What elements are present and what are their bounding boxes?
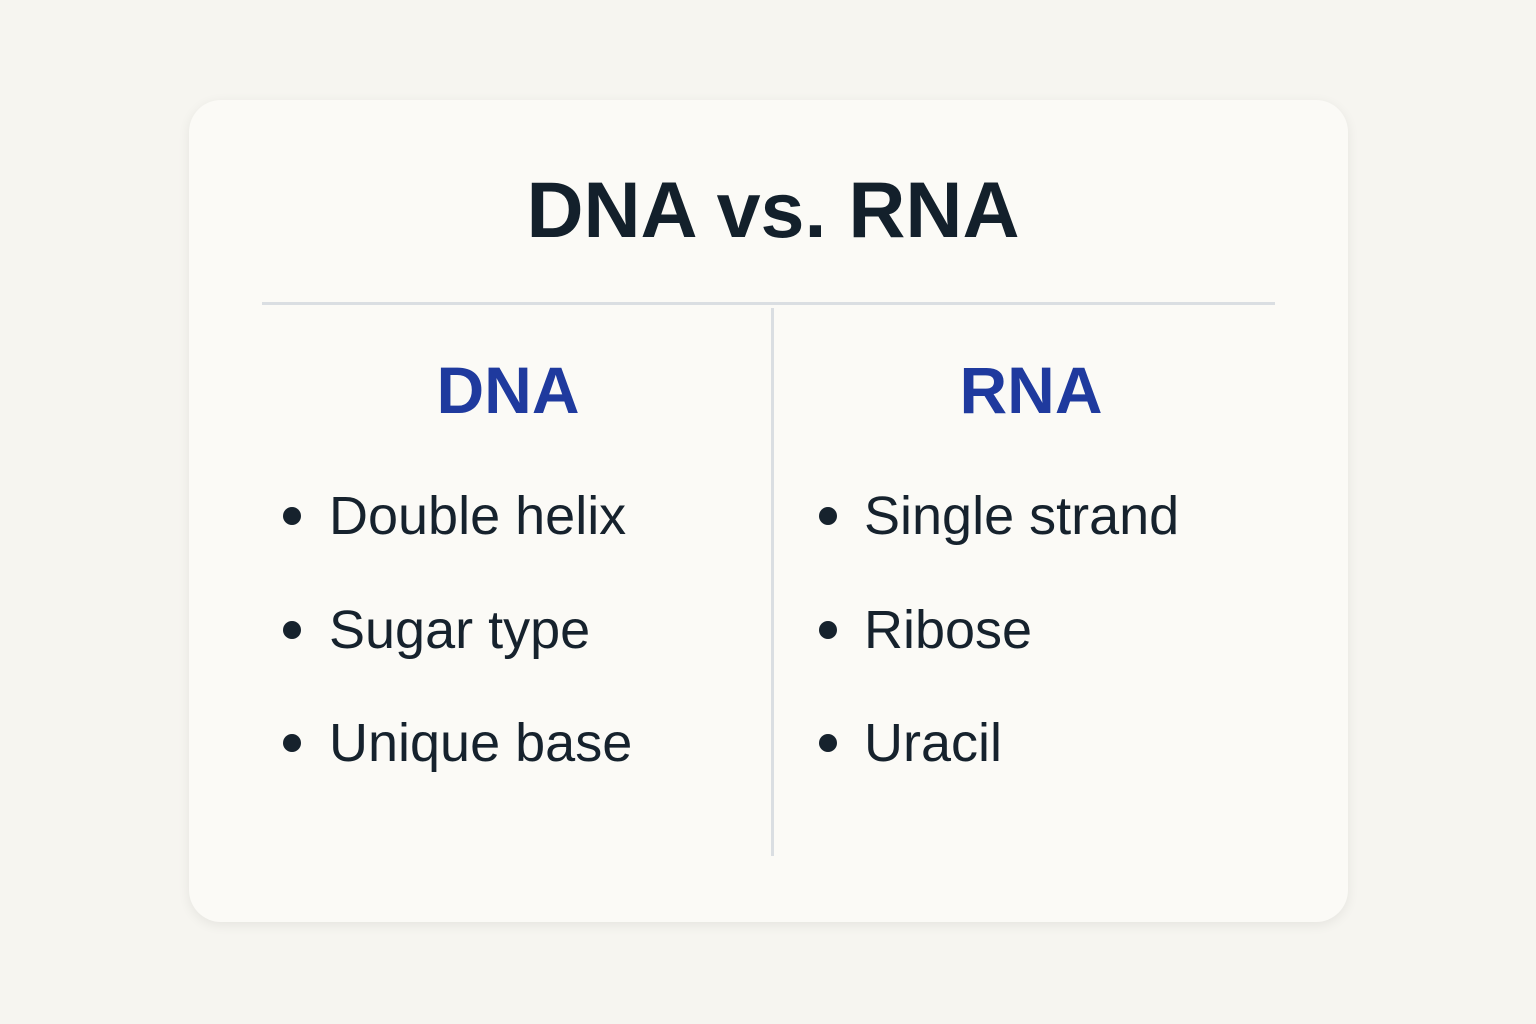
title: DNA vs. RNA bbox=[526, 165, 1020, 254]
list: RNA bbox=[819, 486, 1179, 773]
list: RNA: Single strand bbox=[864, 486, 1179, 546]
card bbox=[189, 100, 1348, 922]
panel: RNA bbox=[819, 353, 1179, 773]
list: DNA bbox=[283, 486, 632, 773]
list: DNA: Double helix bbox=[329, 486, 626, 546]
list: DNA: Unique base bbox=[329, 713, 632, 773]
list: RNA: Ribose bbox=[864, 600, 1032, 660]
panel: DNA bbox=[283, 353, 632, 773]
list: RNA: Uracil bbox=[864, 713, 1002, 773]
heading: DNA: DNA bbox=[436, 353, 580, 427]
list: DNA: Sugar type bbox=[329, 600, 590, 660]
heading: RNA: RNA bbox=[960, 353, 1102, 427]
